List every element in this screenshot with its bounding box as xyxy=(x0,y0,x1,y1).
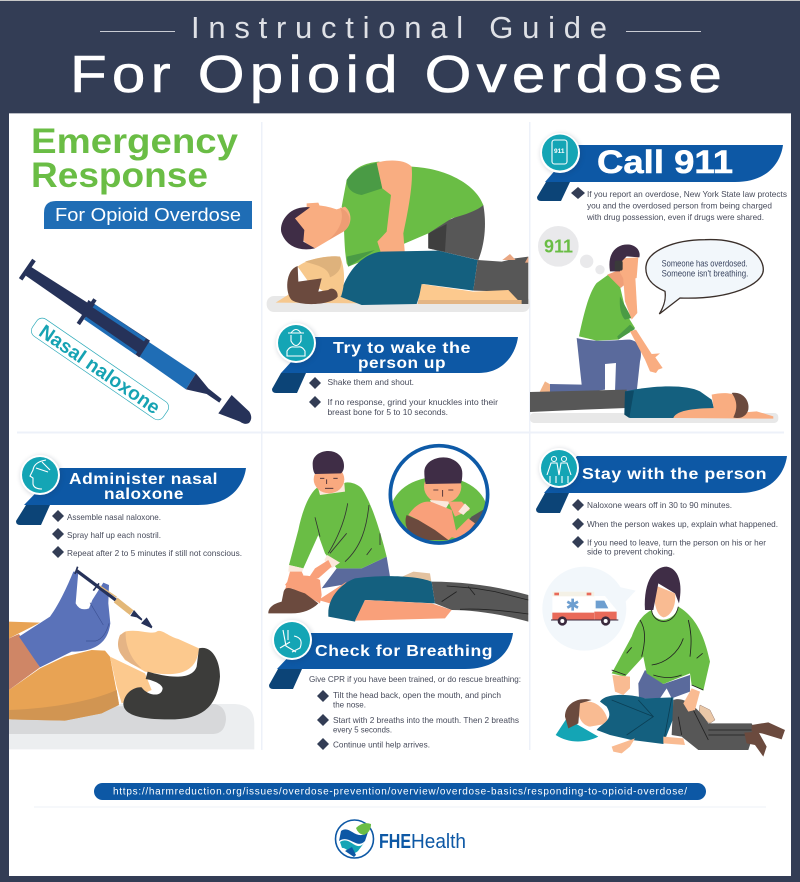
logo: FHE Health: FHE xyxy=(379,831,411,853)
bullet list: check for breathing: Continue until help arrives. xyxy=(333,740,430,750)
banner: check for breathing xyxy=(269,620,513,689)
heading: Emergency Response xyxy=(31,122,239,195)
illustration: man calling 911 beside the person xyxy=(530,226,778,423)
banner: administer: Administer nasal xyxy=(69,471,218,488)
speech bubble: Someone has overdosed. xyxy=(662,258,748,268)
heading: Emergency Response: Emergency xyxy=(31,122,239,161)
illustration: staying with the person in recovery position xyxy=(542,567,785,757)
banner: call 911: Call 911 xyxy=(597,144,733,180)
illustration: administering nasal spray xyxy=(9,567,254,749)
illustration: checking the person for response xyxy=(267,161,530,312)
section: stay with the person xyxy=(536,448,787,556)
section: check for breathing xyxy=(269,620,521,750)
section: administer nasal naloxone xyxy=(16,455,246,558)
bullet list: try to wake: breast bone for 5 to 10 seconds. xyxy=(328,407,448,417)
banner: check for breathing: Check for Breathing xyxy=(315,643,493,660)
speech bubble xyxy=(646,240,763,314)
bullet text: call 911: If you report an overdose, New York State law protects xyxy=(587,189,787,199)
inset: rescue breathing close-up xyxy=(390,446,488,547)
bullet list: stay: When the person wakes up, explain what happened. xyxy=(587,519,778,529)
section: call 911 xyxy=(537,133,787,222)
title: For Opioid Overdose xyxy=(70,46,727,104)
thought bubble: 911 xyxy=(538,226,605,274)
bullet list: stay: Naloxone wears off in 30 to 90 minutes. xyxy=(587,500,732,510)
bullet list: administer: Assemble nasal naloxone. xyxy=(67,512,161,522)
bullet list: administer: Spray half up each nostril. xyxy=(67,530,161,540)
bullet list: check for breathing: Give CPR if you have been trained, or do rescue breathing: xyxy=(309,674,521,684)
illustration: checking for breathing xyxy=(268,446,528,622)
logo: FHE Health xyxy=(336,820,466,858)
bullet list: try to wake xyxy=(309,377,498,417)
banner: administer xyxy=(16,455,246,525)
bullet text: call 911: you and the overdosed person from being charged xyxy=(587,200,772,210)
grid dividers xyxy=(17,122,784,750)
title: Instructional Guide xyxy=(191,10,607,45)
thought bubble: ambulance xyxy=(542,567,636,651)
bullet list: check for breathing: every 5 seconds. xyxy=(333,724,392,734)
bullet list: stay: side to prevent choking. xyxy=(587,546,675,556)
subheading banner: For Opioid Overdose: For Opioid Overdose xyxy=(55,205,241,225)
bullet list: try to wake: If no response, grind your knuckles into their xyxy=(328,397,498,407)
banner: call 911: 911 xyxy=(554,148,565,155)
section: try to wake the person up xyxy=(272,323,518,417)
illustration: nasal naloxone syringe xyxy=(21,260,251,424)
banner: administer: naloxone xyxy=(104,486,184,503)
bullet list: try to wake: Shake them and shout. xyxy=(328,377,414,387)
title xyxy=(70,10,727,104)
banner: try to wake: Try to wake the xyxy=(333,340,471,357)
logo: FHE Health: Health xyxy=(411,831,466,853)
bullet list: check for breathing: Start with 2 breaths into the mouth. Then 2 breaths xyxy=(333,715,519,725)
banner: call 911 xyxy=(537,133,783,201)
thought bubble: 911: 911 xyxy=(544,235,573,256)
bullet list: check for breathing xyxy=(309,674,521,750)
bullet list: stay xyxy=(572,499,778,556)
bullet text: call 911: with drug possession, even if drugs were shared. xyxy=(586,212,764,222)
subheading banner: For Opioid Overdose xyxy=(44,201,252,229)
banner: try to wake: person up xyxy=(358,355,446,372)
source url pill: https://harmreduction.org/issues/overdose-prevention/overview/overdose-basics/responding-to-opioid-overdose/ xyxy=(113,786,687,798)
bullet text: call 911 xyxy=(571,187,787,222)
heading: Emergency Response: Response xyxy=(31,156,208,195)
bullet list: administer: Repeat after 2 to 5 minutes if still not conscious. xyxy=(67,548,242,558)
bullet list: stay: If you need to leave, turn the person on his or her xyxy=(587,538,766,548)
banner: try to wake xyxy=(272,323,518,393)
source url pill xyxy=(94,783,706,800)
bullet list: check for breathing: the nose. xyxy=(333,700,366,710)
speech bubble: Someone isn't breathing. xyxy=(662,269,748,279)
banner: stay xyxy=(536,448,787,513)
bullet list: administer xyxy=(52,510,242,558)
label: Nasal naloxone: Nasal naloxone xyxy=(35,321,164,419)
banner: stay: Stay with the person xyxy=(582,466,767,483)
bullet list: check for breathing: Tilt the head back, open the mouth, and pinch xyxy=(333,690,501,700)
